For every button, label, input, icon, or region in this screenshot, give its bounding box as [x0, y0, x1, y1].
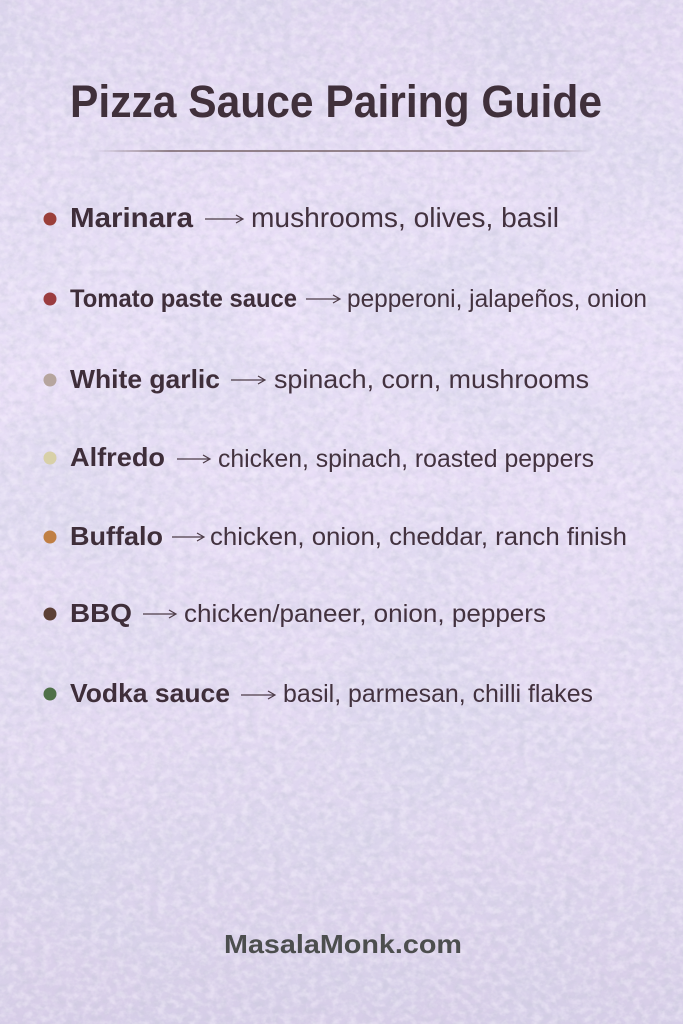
- row: Tomato paste sauce: [44, 285, 647, 313]
- row: White garlic: [44, 364, 589, 394]
- arrow: [172, 533, 204, 541]
- toppings: Vodka sauce: basil, parmesan, chilli flakes: [283, 680, 593, 708]
- bullet: Marinara: [44, 212, 56, 226]
- toppings: BBQ: chicken/paneer, onion, peppers: [184, 600, 546, 628]
- list of sauce pairings: [44, 202, 647, 708]
- arrow: [143, 610, 176, 618]
- sauce name: Alfredo: Alfredo: [70, 442, 165, 472]
- bullet: BBQ: [44, 608, 56, 620]
- bullet: Tomato paste sauce: [44, 292, 56, 306]
- bullet: Buffalo: [44, 530, 56, 544]
- toppings: White garlic: spinach, corn, mushrooms: [274, 364, 589, 394]
- bullet: Vodka sauce: [44, 688, 56, 700]
- sauce name: White garlic: White garlic: [70, 364, 220, 394]
- arrow: [205, 215, 243, 223]
- arrow: [177, 455, 210, 463]
- sauce name: Tomato paste sauce: Tomato paste sauce: [70, 285, 297, 313]
- toppings: Buffalo: chicken, onion, cheddar, ranch finish: [210, 523, 627, 551]
- title: Pizza Sauce Pairing Guide: [70, 76, 602, 127]
- row: Buffalo: [44, 521, 627, 551]
- row: Alfredo: [44, 442, 594, 473]
- bullet: White garlic: [44, 374, 56, 386]
- arrow: [231, 376, 265, 384]
- row: BBQ: [44, 598, 546, 628]
- toppings: Tomato paste sauce: pepperoni, jalapeños, onion: [347, 285, 647, 313]
- toppings: Marinara: mushrooms, olives, basil: [251, 202, 559, 233]
- bullet: Alfredo: [44, 452, 56, 464]
- sauce name: BBQ: BBQ: [70, 598, 132, 628]
- toppings: Alfredo: chicken, spinach, roasted peppers: [218, 445, 594, 473]
- sauce name: Vodka sauce: Vodka sauce: [70, 678, 230, 708]
- sauce name: Marinara: Marinara: [70, 202, 193, 233]
- row: Marinara: [44, 202, 559, 233]
- footer: website: MasalaMonk.com: [224, 929, 462, 959]
- sauce name: Buffalo: Buffalo: [70, 521, 163, 551]
- arrow: [306, 295, 340, 303]
- arrow: [241, 691, 275, 699]
- row: Vodka sauce: [44, 678, 593, 708]
